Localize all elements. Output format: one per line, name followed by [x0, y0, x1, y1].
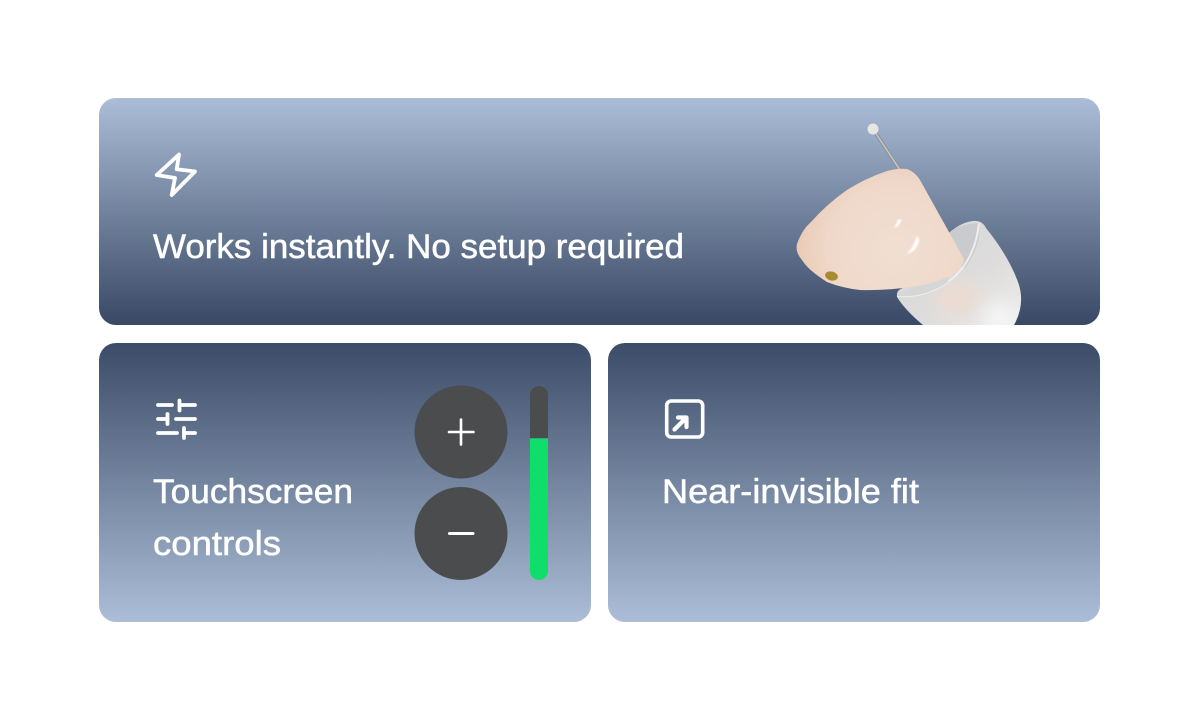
text: controls: controls: [153, 525, 281, 563]
button: minus: [414, 487, 508, 580]
icon: arrow in square: [667, 401, 703, 437]
panel: near-invisible fit: [608, 343, 1100, 622]
panel: touchscreen controls: [99, 343, 591, 622]
panel: works instantly: [99, 98, 1100, 334]
image: hearing aid: [797, 124, 1021, 334]
button: plus: [414, 386, 508, 478]
heading: works instantly: Works instantly. No setup required: [153, 228, 684, 266]
icon: sliders: [158, 400, 195, 438]
volume bar: [530, 386, 548, 580]
icon: lightning bolt: [157, 154, 195, 195]
heading: near-invisible fit: Near-invisible fit: [662, 473, 920, 511]
heading: touchscreen controls: Touchscreen: [153, 473, 353, 511]
